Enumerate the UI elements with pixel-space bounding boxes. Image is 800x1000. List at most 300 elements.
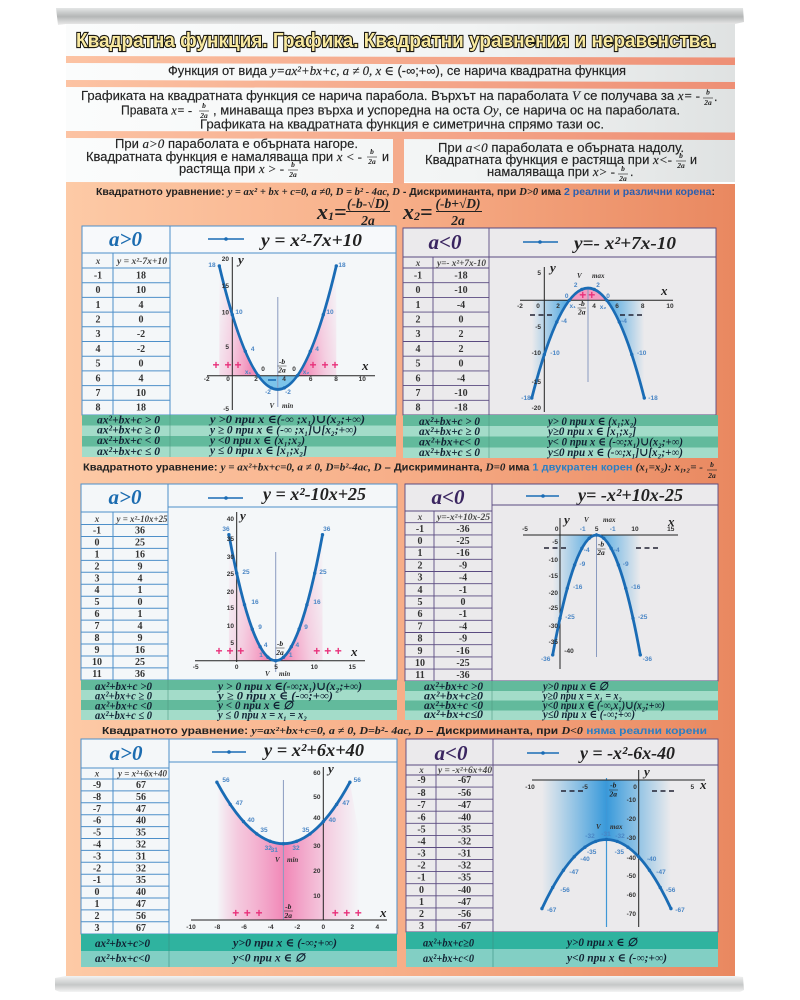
value table: 6	[416, 373, 420, 384]
parabola chart: 2	[350, 924, 354, 931]
parabola chart: x	[699, 777, 707, 792]
inequality rows: y<0 при x ∈ (-∞;+∞)	[565, 952, 667, 964]
value table: 8	[96, 403, 100, 414]
parabola chart: V	[584, 516, 590, 524]
value table: -56	[458, 909, 471, 920]
inequality rows: y ≥ 0 при x ∈ (-∞ ;x₁]∪[x₂;+∞)	[208, 424, 357, 436]
parabola chart	[522, 512, 678, 669]
heading: discriminant zero: Квадратното уравнение: y = ax²+bx+c=0, a ≠ 0, D=b²-4ac, D – Дискриминанта, D=0 има 1 двукратен корен (x₁=x₂): x₁,₂= -	[83, 462, 704, 474]
value table: 2	[458, 344, 464, 355]
text block: parabola vertex and axis: Правата x= -	[121, 104, 192, 118]
value table: 3	[94, 573, 100, 584]
inequality rows: ax²+bx+c ≤ 0	[97, 446, 160, 458]
inequality rows: ax²+bx+c≥0	[423, 938, 474, 950]
value table: 3	[419, 921, 424, 932]
text block: a less than zero: Квадратната функция е растяща при x<-	[425, 153, 672, 167]
parabola chart: -16	[631, 584, 641, 591]
parabola chart: -18	[521, 395, 531, 402]
parabola chart: 25	[227, 571, 234, 578]
value table: 5	[96, 359, 100, 370]
value table: y=- x²+7x-10	[436, 258, 487, 268]
value table: 9	[94, 645, 100, 656]
parabola chart: -25	[565, 614, 575, 621]
equation: y = x²+6x+40	[262, 740, 364, 760]
parabola chart: 0	[226, 376, 230, 383]
value table: -32	[458, 861, 471, 872]
value table: 4	[138, 373, 144, 384]
parabola chart: +	[332, 906, 339, 920]
text block: a less than zero: b	[679, 151, 683, 160]
inequality rows: y≥0 при x = x₁ = x₂	[541, 690, 622, 702]
value table: 31	[136, 851, 146, 862]
text block: a greater than zero: b	[370, 147, 374, 156]
parabola chart: -40	[627, 855, 636, 862]
inequality rows: ax²+bx+c< 0	[419, 436, 480, 448]
parabola chart: max	[592, 272, 605, 280]
text block: parabola vertex and axis: .	[714, 90, 717, 104]
equation: y=- x²+7x-10	[572, 233, 676, 253]
inequality rows: ax²+bx+c <0	[95, 700, 152, 712]
value table: 4	[96, 344, 100, 355]
parabola chart: +	[226, 644, 234, 658]
parabola chart: -2	[265, 389, 271, 396]
formula: roots: x	[403, 199, 414, 224]
parabola chart: max	[610, 823, 623, 831]
parabola chart: -5	[582, 784, 588, 791]
value table: y=-x²+10x-25	[436, 512, 491, 522]
formula: roots: 2	[413, 209, 420, 223]
value table: 6	[418, 609, 422, 620]
text block: a greater than zero: растяща при x > -	[179, 162, 284, 176]
parabola chart: 9	[258, 624, 262, 631]
value table: 3	[96, 329, 100, 340]
formula: roots: 2a	[450, 213, 465, 228]
value table: -2	[137, 344, 145, 355]
parabola chart: 2	[254, 376, 258, 383]
value table: -67	[458, 921, 471, 932]
parabola chart: 30	[227, 554, 234, 561]
value table: 7	[418, 621, 422, 632]
value table: 11	[415, 670, 425, 681]
value table: -8	[417, 788, 426, 799]
parabola chart: 15	[667, 526, 675, 533]
equation: y = x²-10x+25	[261, 484, 366, 504]
parabola chart: 9	[304, 624, 308, 631]
panel: y = x²-10x+25	[81, 484, 397, 722]
parabola chart: x₁	[245, 369, 251, 376]
value table: x	[94, 768, 100, 778]
value table: -40	[458, 885, 471, 896]
parabola chart: V	[265, 670, 271, 678]
parabola chart: 0	[261, 366, 265, 373]
text block: a greater than zero: b	[291, 160, 295, 169]
parabola chart: -2	[517, 303, 523, 310]
parabola chart: +	[244, 906, 251, 920]
text block: a greater than zero: Квадратната функция е намаляваща при x < -	[86, 150, 362, 164]
inequality rows: ax²+bx+c ≤ 0	[419, 447, 480, 459]
value table: -4	[457, 373, 465, 384]
parabola chart: 35	[302, 827, 310, 834]
value table: -32	[458, 836, 471, 848]
parabola chart: y	[548, 260, 556, 275]
value table: 3	[94, 923, 100, 934]
inequality rows	[405, 681, 718, 721]
inequality rows	[406, 932, 718, 967]
legend line	[526, 494, 559, 498]
parabola chart: 10	[235, 309, 243, 316]
value table: 36	[135, 669, 145, 680]
parabola chart: 20	[313, 868, 321, 875]
parabola chart: +	[588, 288, 595, 302]
value table: -10	[454, 388, 468, 399]
parabola chart: 8	[641, 303, 645, 310]
value table: 1	[94, 549, 100, 560]
inequality rows: y≥0 при x ∈ [x₁;x₂]	[546, 426, 636, 438]
inequality rows: ax²+bx+c≥0	[424, 690, 483, 702]
parabola chart: 0	[565, 293, 569, 300]
header a<0: a<0	[429, 230, 462, 254]
parabola chart: 25	[319, 569, 327, 576]
text block: parabola vertex and axis: 2a	[199, 111, 208, 120]
parabola chart: y	[238, 508, 246, 523]
value table: -9	[459, 560, 467, 571]
parabola chart: +	[343, 906, 350, 920]
parabola chart: -20	[627, 816, 636, 823]
inequality rows: ax²+bx+c ≥ 0	[97, 424, 160, 436]
parabola chart: -56	[560, 887, 570, 894]
parabola chart: +	[224, 358, 232, 372]
parabola chart: min	[282, 402, 293, 410]
value table: -18	[454, 403, 468, 414]
value table: 4	[418, 585, 422, 596]
inequality rows: ax²+bx+c>0	[95, 938, 150, 950]
parabola chart: -9	[579, 561, 586, 568]
text block: a greater than zero: 2a	[367, 157, 376, 166]
value table	[82, 226, 396, 415]
parabola chart: 18	[208, 262, 216, 269]
value table: 25	[135, 657, 145, 668]
parabola chart: 2a	[284, 911, 292, 920]
parabola chart: 2a	[596, 548, 605, 557]
parabola chart: x	[350, 644, 358, 659]
parabola chart: -10	[532, 350, 541, 357]
parabola chart: 10	[222, 310, 229, 316]
parabola chart: 4	[592, 303, 596, 310]
parabola chart: 4	[264, 642, 268, 649]
inequality rows: ax²+bx+c<0	[95, 953, 150, 965]
value table: -5	[417, 824, 426, 835]
value table: -10	[454, 285, 468, 296]
inequality rows: ax²+bx+c ≥ 0	[95, 690, 152, 702]
parabola chart: min	[279, 670, 290, 678]
value table: 16	[135, 549, 145, 560]
parabola chart: 2	[556, 303, 560, 310]
parabola chart: -50	[627, 873, 636, 880]
value table: -25	[456, 658, 470, 669]
inequality rows	[82, 414, 396, 458]
parabola chart: 0	[633, 784, 637, 791]
value table: x	[417, 512, 423, 522]
parabola chart: -15	[549, 573, 558, 580]
inequality rows: y ≤ 0 при x = x₁ = x₂	[216, 710, 307, 722]
inequality rows: ax²+bx+c >0	[424, 681, 483, 693]
value table: y = x²+6x+40	[117, 768, 167, 778]
value table: -35	[458, 824, 471, 835]
value table: 4	[416, 344, 420, 355]
parabola chart: +	[321, 358, 329, 372]
parabola chart: y	[562, 512, 570, 527]
value table: -36	[456, 524, 470, 535]
value table: y = -x²+6x+40	[437, 765, 493, 775]
header a<0: a<0	[432, 485, 465, 509]
parabola chart: 40	[313, 815, 321, 822]
value table: 35	[136, 875, 146, 886]
parabola chart: -18	[648, 395, 658, 402]
value table	[403, 228, 716, 415]
parabola chart: 10	[311, 664, 318, 671]
parabola chart: 2	[574, 282, 578, 289]
value table: x	[415, 258, 421, 268]
formula: roots: (-b-√D)	[347, 196, 389, 211]
value table: -7	[417, 800, 426, 811]
parabola chart: V	[275, 856, 281, 864]
text block: parabola vertex and axis: , минаваща през върха и успоредна на оста Oy, се нарича ос на параболата.	[213, 104, 680, 118]
value table: -3	[417, 848, 426, 860]
poster background	[66, 20, 735, 976]
parabola chart: 5	[537, 270, 541, 277]
parabola chart: -b	[285, 902, 292, 911]
parabola chart: -2	[285, 389, 291, 396]
equation: y= -x²+10x-25	[576, 485, 683, 505]
parabola chart: -b	[279, 357, 285, 366]
parabola chart: 2	[596, 282, 600, 289]
parabola chart: -9	[623, 561, 629, 568]
value table: 2	[94, 561, 100, 572]
text block: parabola vertex and axis: Графиката на квадратната функция е симетрична спрямо тази ос.	[200, 118, 604, 132]
parabola chart: 56	[222, 777, 230, 784]
parabola chart: -70	[627, 911, 636, 918]
text block: a greater than zero	[86, 137, 389, 179]
parabola chart: 47	[236, 800, 243, 807]
top roller	[56, 8, 744, 25]
formula: roots: x	[317, 199, 328, 224]
parabola chart: -47	[656, 869, 666, 876]
value table	[81, 739, 397, 934]
parabola chart: -40	[580, 856, 590, 863]
inequality rows: y>0 при x ∈ ∅	[541, 681, 609, 693]
parabola chart: +	[234, 358, 242, 372]
value table: -36	[456, 670, 470, 681]
text block: a less than zero: b	[621, 164, 625, 173]
parabola chart: 8	[334, 376, 338, 383]
value table: -35	[458, 873, 471, 884]
parabola chart: -10	[550, 350, 560, 357]
value table: -67	[458, 775, 471, 786]
value table: 40	[136, 816, 146, 827]
value table: -4	[459, 573, 467, 584]
parabola chart: -5	[223, 406, 229, 413]
value table: 2	[458, 329, 464, 340]
parabola chart: x₂	[303, 369, 309, 376]
inequality rows: ax²+bx+c < 0	[97, 435, 160, 447]
value table: 7	[96, 388, 100, 399]
parabola chart: +	[212, 358, 220, 372]
parabola chart: -1	[580, 526, 586, 533]
value table: -1	[93, 526, 101, 536]
parabola chart: 60	[313, 770, 321, 777]
parabola chart: -b	[598, 540, 604, 548]
value table: 0	[94, 537, 100, 548]
value table: x	[95, 256, 101, 266]
value table: 1	[94, 899, 100, 910]
parabola chart: 20	[222, 256, 229, 263]
value table: 2	[416, 314, 420, 326]
inequality rows: y>0 при x ∈ ∅	[565, 937, 638, 949]
inequality rows: ax²+bx+c≤0	[424, 709, 483, 721]
text block: a greater than zero: При a>0 параболата е обърната нагоре.	[115, 137, 358, 151]
value table: 0	[416, 285, 420, 296]
inequality rows: ax²+bx+c <0	[424, 700, 483, 712]
parabola chart: 18	[338, 262, 346, 269]
parabola chart: -b	[610, 780, 617, 790]
parabola chart: -20	[532, 405, 541, 412]
value table: -1	[93, 875, 101, 886]
panel: y = -x²+7x-10	[403, 228, 718, 459]
parabola chart: 10	[631, 526, 639, 533]
value table: 0	[460, 597, 466, 608]
value table: -4	[417, 836, 426, 848]
parabola chart: 5	[595, 526, 599, 533]
parabola chart: 4	[315, 346, 319, 353]
parabola chart: -25	[638, 614, 648, 621]
value table: 5	[94, 597, 100, 608]
parabola chart: -32	[615, 833, 625, 840]
inequality rows: y≤0 при x ∈ (-∞;x₁]∪[x₂;+∞)	[546, 447, 683, 459]
definition line: Функция от вида y=ax²+bx+c, a ≠ 0, x ∈ (-∞;+∞), се нарича квадратна функция	[168, 64, 626, 78]
value table: 18	[136, 270, 146, 281]
parabola chart: 4	[375, 924, 379, 931]
parabola chart: -25	[549, 605, 558, 612]
parabola chart: -30	[549, 623, 558, 630]
parabola chart: 0	[555, 526, 559, 533]
text block: parabola vertex and axis: b	[706, 88, 710, 96]
formula: roots: 1	[328, 209, 334, 223]
formula: roots: (-b+√D)	[435, 196, 481, 211]
parabola chart: -67	[675, 907, 685, 914]
parabola chart: 0	[606, 293, 610, 300]
value table: -9	[417, 775, 426, 786]
parabola chart: 35	[227, 536, 234, 543]
value table: -1	[94, 270, 102, 281]
value table: -4	[93, 840, 101, 850]
parabola chart: max	[603, 516, 616, 524]
value table: -25	[456, 536, 470, 547]
parabola chart: -35	[615, 849, 624, 856]
parabola chart: 15	[222, 283, 229, 290]
value table: 67	[136, 780, 146, 791]
parabola chart: 10	[326, 309, 334, 316]
legend line	[212, 750, 246, 754]
value table: y = x²-7x+10	[116, 256, 168, 266]
legend line	[523, 240, 558, 244]
value table: 10	[415, 658, 425, 669]
parabola chart: 31	[271, 847, 278, 854]
parabola chart: 0	[536, 303, 540, 310]
header a>0: a>0	[110, 741, 143, 765]
header a<0: a<0	[435, 741, 468, 765]
parabola chart: V	[577, 272, 583, 280]
value table: 11	[92, 669, 102, 680]
parabola chart: 35	[260, 827, 268, 834]
parabola chart: 32	[265, 845, 272, 852]
value table: -1	[459, 609, 467, 620]
text block: parabola vertex and axis	[81, 88, 717, 132]
parabola chart: -2	[294, 924, 301, 931]
parabola chart: -4	[621, 318, 627, 325]
value table: 1	[416, 300, 420, 311]
inequality rows	[81, 934, 397, 967]
value table: 36	[135, 526, 145, 536]
panel: y = x²+6x+40	[81, 739, 397, 967]
parabola chart: -16	[573, 584, 583, 591]
parabola chart: +	[237, 644, 244, 658]
parabola chart: 0	[292, 366, 296, 373]
inequality rows: y > 0 при x ∈(-∞;x₁)∪(x₂;+∞)	[216, 681, 362, 693]
parabola chart: 1	[259, 652, 263, 659]
inequality rows: ax²+bx+c ≥ 0	[419, 426, 480, 438]
parabola chart: -31	[601, 831, 611, 838]
inequality rows: y >0 при x ∈(-∞ ;x₁)∪(x₂;+∞)	[208, 414, 365, 426]
value table: 1	[419, 897, 424, 908]
value table: 8	[416, 403, 420, 414]
parabola chart: 2a	[609, 790, 617, 798]
value table: 4	[94, 585, 100, 596]
formula: roots: 2a	[360, 213, 375, 228]
parabola chart: 4	[282, 376, 286, 383]
panel: y = -x²+10x-25	[405, 484, 718, 721]
parabola chart: -67	[547, 907, 557, 914]
parabola chart	[525, 764, 707, 927]
parabola chart: -40	[564, 648, 574, 655]
value table: -8	[93, 792, 101, 803]
value table: 2	[94, 911, 100, 922]
parabola chart: -10	[637, 350, 647, 357]
parabola chart: 10	[227, 623, 234, 630]
parabola chart: +	[331, 358, 339, 372]
parabola chart: x	[379, 905, 387, 920]
inequality rows: y ≤ 0 при x ∈ [x₁;x₂]	[208, 445, 307, 457]
bottom roller	[55, 976, 744, 992]
parabola chart: 15	[349, 664, 356, 671]
parabola chart: -36	[541, 656, 551, 663]
parabola chart: -2	[204, 376, 210, 383]
value table: 16	[135, 645, 145, 656]
parabola chart: -b	[277, 639, 283, 648]
parabola chart: -20	[549, 590, 558, 597]
value table: 6	[96, 373, 100, 384]
value table: -9	[93, 780, 101, 791]
value table: -9	[459, 634, 467, 645]
parabola chart: -4	[584, 547, 590, 554]
parabola chart: +	[335, 644, 342, 658]
value table: 25	[135, 537, 145, 548]
parabola chart: -5	[552, 539, 558, 546]
parabola chart: x	[660, 283, 668, 298]
formula: roots: =	[420, 199, 433, 224]
parabola chart: +	[255, 906, 263, 920]
value table: 5	[418, 597, 422, 608]
parabola chart: 50	[313, 794, 321, 801]
